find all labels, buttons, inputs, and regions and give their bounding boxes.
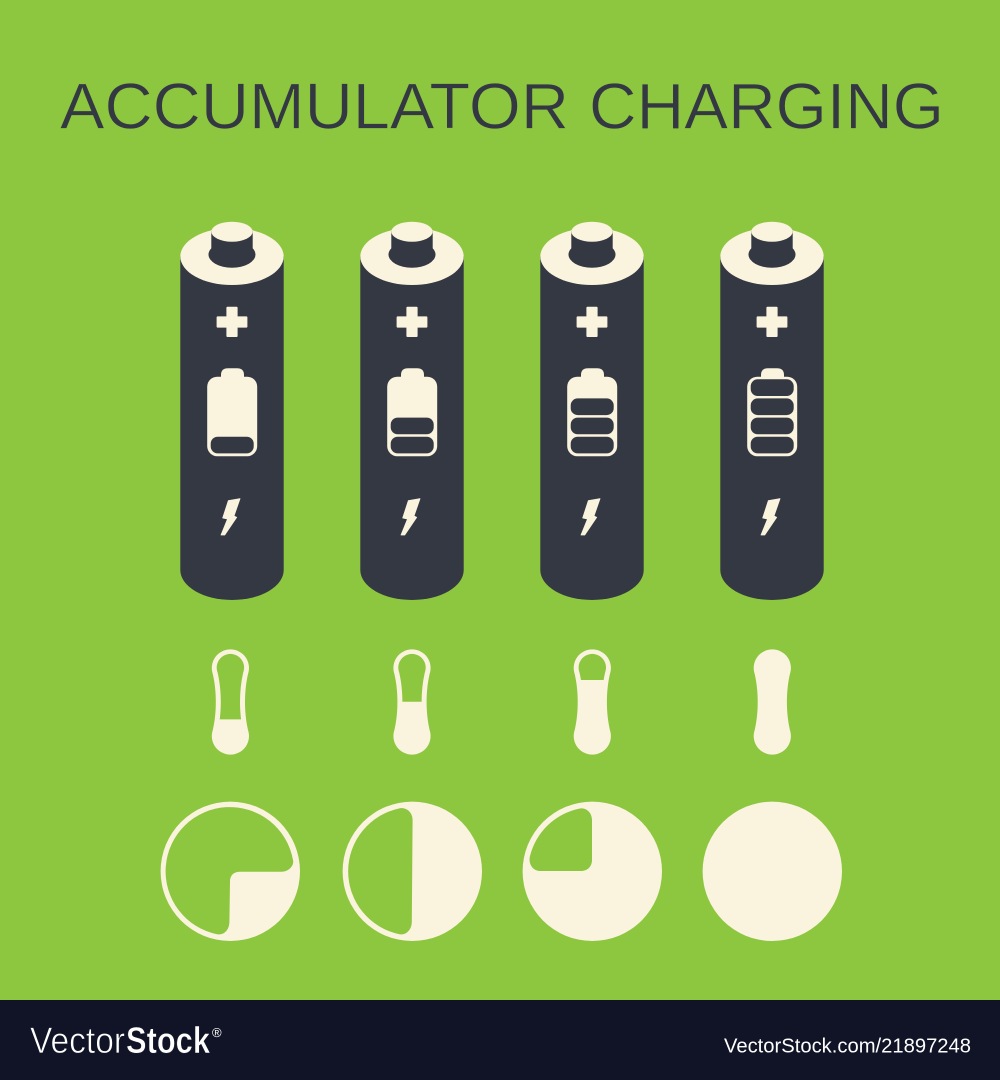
gauge 1: quarter filled — [212, 649, 249, 755]
footer bar — [0, 1000, 1000, 1080]
gauge 4: full — [754, 649, 791, 755]
title — [60, 70, 944, 143]
title: CHARGING — [589, 70, 944, 143]
battery body — [540, 256, 644, 600]
icon: lightning bolt — [221, 499, 240, 535]
battery body — [720, 256, 824, 600]
icon: charge level — [207, 368, 257, 456]
pie 4: full — [703, 802, 842, 941]
battery top terminal — [360, 222, 464, 285]
footer logo: Stock — [126, 1020, 210, 1061]
pie 3: three quarters filled — [523, 802, 662, 941]
icon: lightning bolt — [581, 499, 600, 535]
registered mark: ® — [212, 1025, 222, 1040]
icon: lightning bolt — [761, 499, 780, 535]
footer logo: Vector — [30, 1020, 125, 1061]
gauge 3: three quarters filled — [574, 649, 611, 755]
battery 4: four cells — [720, 222, 824, 600]
title: ACCUMULATOR — [60, 70, 569, 143]
icon: plus — [578, 308, 606, 336]
icon: lightning bolt — [401, 499, 420, 535]
icon: plus — [218, 308, 246, 336]
battery body — [180, 256, 284, 600]
icon: plus — [398, 308, 426, 336]
icon: charge level — [567, 368, 617, 456]
battery 2: two cells — [360, 222, 464, 600]
battery body — [360, 256, 464, 600]
battery 1: one cell — [180, 222, 284, 600]
gauge 2: half filled — [393, 649, 431, 755]
footer logo — [30, 1020, 210, 1061]
icon: charge level — [747, 368, 797, 456]
battery top terminal — [720, 222, 824, 285]
icon: plus — [758, 308, 786, 336]
battery top terminal — [180, 222, 284, 285]
pie 1: quarter filled — [161, 802, 300, 941]
battery 3: three cells — [540, 222, 644, 600]
battery top terminal — [540, 222, 644, 285]
icon: charge level — [387, 368, 437, 456]
footer image id: VectorStock.com/21897248 — [724, 1036, 971, 1058]
pie 2: half filled — [343, 802, 482, 941]
